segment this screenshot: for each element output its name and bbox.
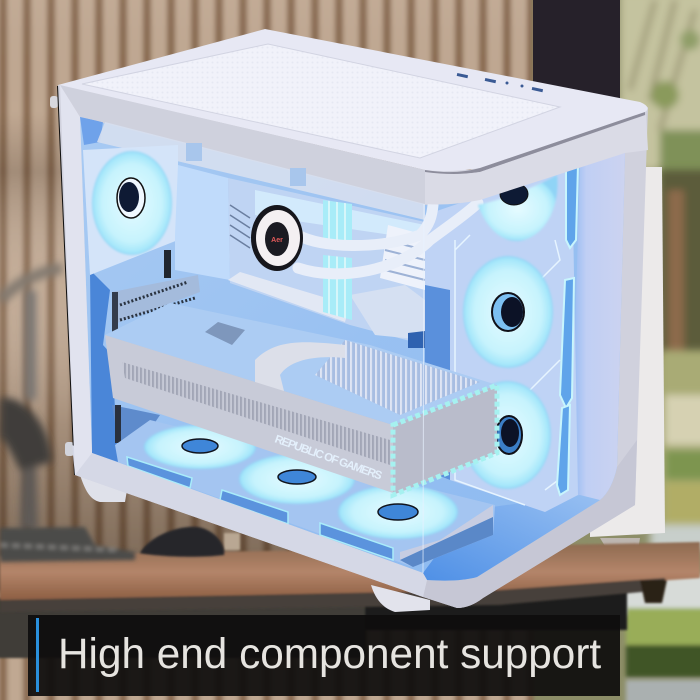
right glass return [570, 153, 625, 500]
rear fan [83, 145, 178, 275]
VRM heatsink stripes [380, 225, 425, 290]
wood slat wall [0, 0, 533, 700]
garden trunks right [660, 170, 700, 360]
GPU side face [105, 335, 393, 493]
rear side shadow [80, 117, 103, 145]
bottom front rail [72, 445, 427, 597]
AIO pump head [251, 205, 303, 271]
PC case [50, 29, 648, 612]
rail clips [186, 143, 306, 186]
right fan lower [463, 381, 551, 489]
GPU [105, 303, 497, 495]
rear dark edge [57, 86, 78, 475]
left frame post [60, 85, 92, 475]
connectors under cooler [350, 285, 425, 340]
lawn right [620, 575, 700, 700]
caption text: High end component support [58, 630, 601, 677]
GPU top face [105, 303, 497, 425]
translucent inner rail [97, 122, 425, 220]
mouse [140, 527, 224, 557]
chassis right bracket [425, 165, 578, 512]
dark doorway column [533, 0, 620, 110]
right fan middle [463, 256, 553, 368]
lower right grey shell edge [423, 440, 637, 608]
top mesh panel [82, 44, 560, 158]
vertical LED strips [557, 164, 578, 495]
top band of window frame [60, 85, 425, 204]
front frame body [58, 85, 648, 608]
GPU end plate [393, 385, 497, 495]
under desk shadow [0, 590, 627, 658]
keyboard [0, 527, 135, 562]
desk [0, 542, 700, 612]
bracket white lines [455, 235, 565, 505]
caption accent line [36, 618, 39, 692]
floor [423, 495, 600, 581]
lower vent slots [127, 457, 393, 560]
tray end block [400, 505, 493, 560]
case feet [80, 475, 430, 612]
rear IO and PCI slots [112, 250, 200, 443]
white box behind case [590, 167, 665, 551]
small light block behind mouse [224, 533, 240, 550]
right fan top [478, 175, 558, 241]
right top band over fans [425, 115, 648, 204]
grey top edge on right [425, 112, 645, 174]
RAM sticks [323, 200, 352, 320]
garden shrubs right [650, 350, 700, 550]
front IO ports [457, 73, 543, 92]
rear thumbscrews [50, 96, 74, 456]
pump logo: Aer [271, 237, 283, 244]
caption bar [28, 615, 620, 696]
motherboard [228, 178, 425, 345]
garden through window top [620, 0, 700, 180]
GPU brand text: REPUBLIC OF GAMERS [273, 434, 384, 483]
cooling tubes [298, 203, 478, 274]
bottom fan tray [115, 420, 495, 567]
headphones on stand [0, 268, 62, 530]
top face [58, 29, 648, 171]
motherboard shroud bracket [175, 165, 230, 280]
front glass edge [423, 204, 424, 573]
fan hub [117, 178, 145, 218]
fan hubs [182, 439, 418, 520]
bracket cut-out dark blue [425, 285, 450, 480]
window interior base [80, 117, 625, 581]
garden base [530, 0, 700, 700]
